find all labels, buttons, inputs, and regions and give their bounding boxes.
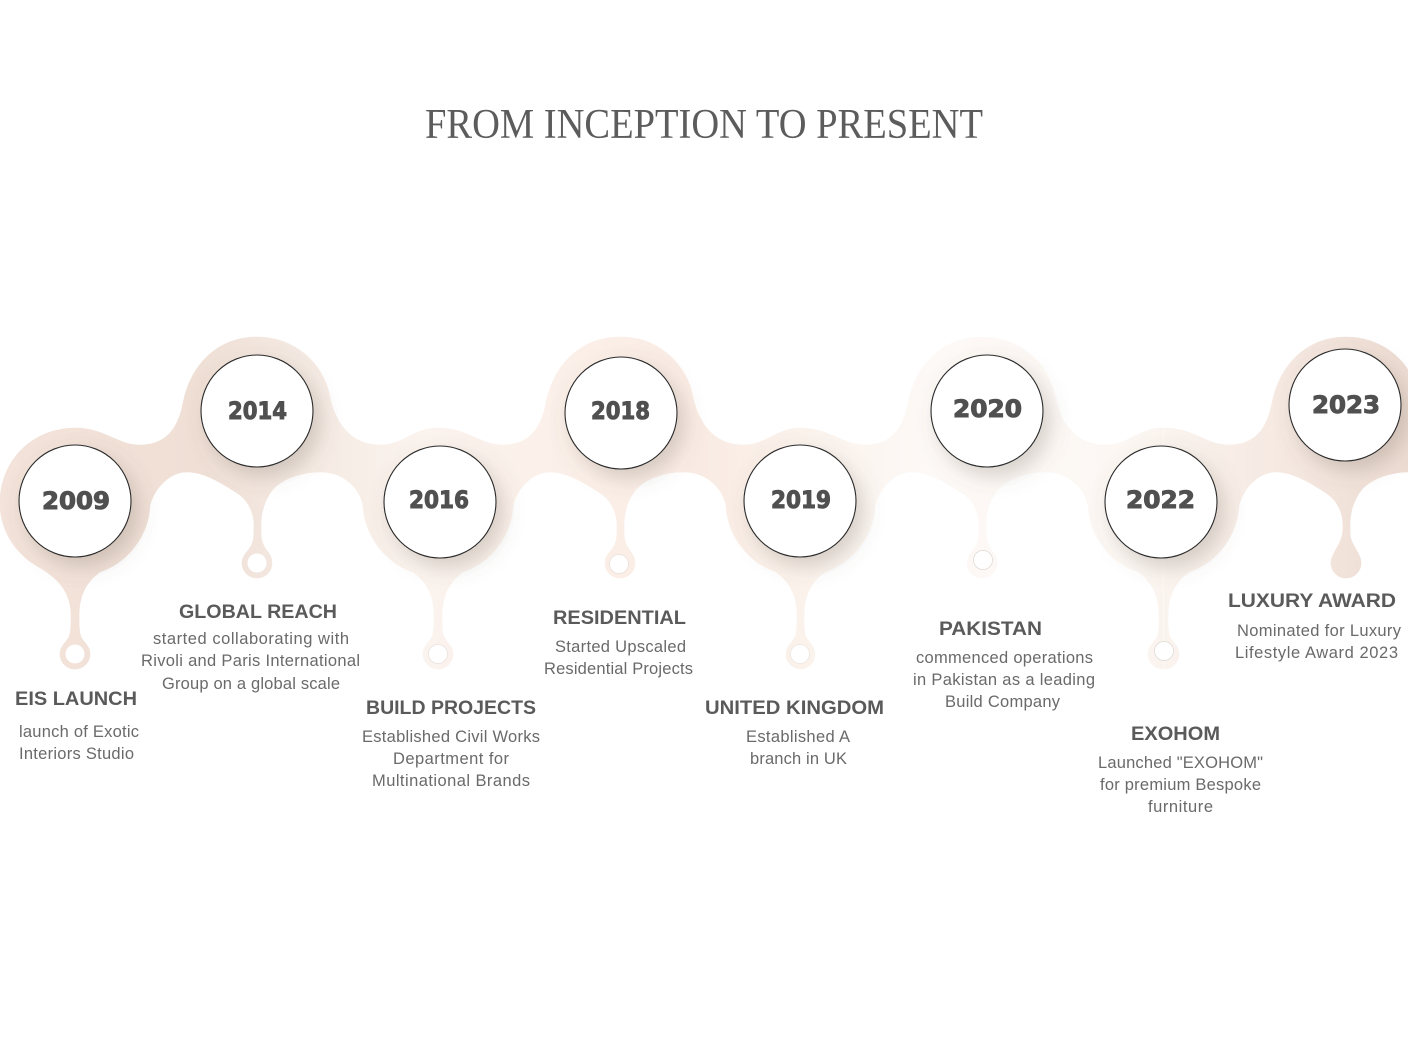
milestone: Residential: Started Upscaled <box>555 638 686 656</box>
milestone: Build Projects: Department for <box>393 750 510 768</box>
milestone: United Kingdom <box>705 698 884 768</box>
timeline wave band <box>0 330 1408 675</box>
milestone: Exohom: for premium Bespoke <box>1100 776 1261 794</box>
milestone: Build Projects: BUILD PROJECTS <box>366 698 536 719</box>
milestone: Residential: Residential Projects <box>544 660 693 678</box>
milestone: Luxury Award: LUXURY AWARD <box>1228 591 1396 612</box>
dot: 2018 <box>610 554 628 574</box>
milestone: Luxury Award: Lifestyle Award 2023 <box>1235 644 1398 662</box>
milestone: Pakistan: commenced operations <box>916 649 1093 667</box>
node: 2009 <box>19 445 131 557</box>
milestone: Build Projects: Multinational Brands <box>372 772 530 790</box>
milestone: Residential: RESIDENTIAL <box>553 608 686 629</box>
milestone: Exohom: furniture <box>1148 798 1213 816</box>
milestone: Residential <box>544 608 693 678</box>
milestone: Pakistan: Build Company <box>945 693 1061 711</box>
milestone: United Kingdom: UNITED KINGDOM <box>705 698 884 719</box>
milestone: Luxury Award: Nominated for Luxury <box>1237 622 1402 640</box>
dot: 2016 <box>428 644 448 664</box>
dot: 2020 <box>974 550 992 570</box>
milestone: Global Reach: started collaborating with <box>153 630 349 648</box>
milestone: EIS Launch: Interiors Studio <box>19 745 134 763</box>
node: 2022: 2022 <box>1126 486 1195 514</box>
node: 2014 <box>201 355 313 467</box>
node: 2023 <box>1289 349 1401 461</box>
node: 2009: 2009 <box>42 487 110 515</box>
milestone: EIS Launch: EIS LAUNCH <box>15 689 137 710</box>
milestone: Build Projects <box>362 698 540 790</box>
node: 2016: 2016 <box>409 486 469 514</box>
milestone: EIS Launch: launch of Exotic <box>19 723 139 741</box>
dot: 2014 <box>248 554 266 572</box>
dot: 2009 <box>66 644 84 664</box>
node: 2019 <box>744 445 856 557</box>
dot: 2019 <box>790 644 810 664</box>
node: 2019: 2019 <box>771 486 831 514</box>
node: 2022 <box>1105 446 1217 558</box>
milestone: Exohom: EXOHOM <box>1131 724 1220 745</box>
node: 2020 <box>931 355 1043 467</box>
milestone: Global Reach: GLOBAL REACH <box>179 602 337 623</box>
milestone: United Kingdom: branch in UK <box>750 750 847 768</box>
milestone: United Kingdom: Established A <box>746 728 850 746</box>
milestone: Global Reach <box>141 602 360 693</box>
node: 2020: 2020 <box>953 395 1022 423</box>
milestone: Global Reach: Group on a global scale <box>162 675 340 693</box>
node: 2018 <box>565 357 677 469</box>
milestone: Exohom <box>1098 724 1263 816</box>
milestone: Build Projects: Established Civil Works <box>362 728 540 746</box>
node: 2023: 2023 <box>1312 391 1380 419</box>
milestone: Pakistan: PAKISTAN <box>939 619 1042 640</box>
dot: 2022 <box>1154 642 1174 660</box>
milestone: Luxury Award <box>1228 591 1402 662</box>
title: FROM INCEPTION TO PRESENT <box>425 102 983 148</box>
milestone: EIS Launch <box>15 689 139 763</box>
milestone: Pakistan <box>913 619 1095 711</box>
milestone: Exohom: Launched "EXOHOM" <box>1098 754 1263 772</box>
node: 2014: 2014 <box>228 397 287 425</box>
milestone: Global Reach: Rivoli and Paris International <box>141 652 360 670</box>
milestone: Pakistan: in Pakistan as a leading <box>913 671 1095 689</box>
node: 2018: 2018 <box>591 397 650 425</box>
connector dots <box>66 550 1174 664</box>
node: 2016 <box>384 446 496 558</box>
